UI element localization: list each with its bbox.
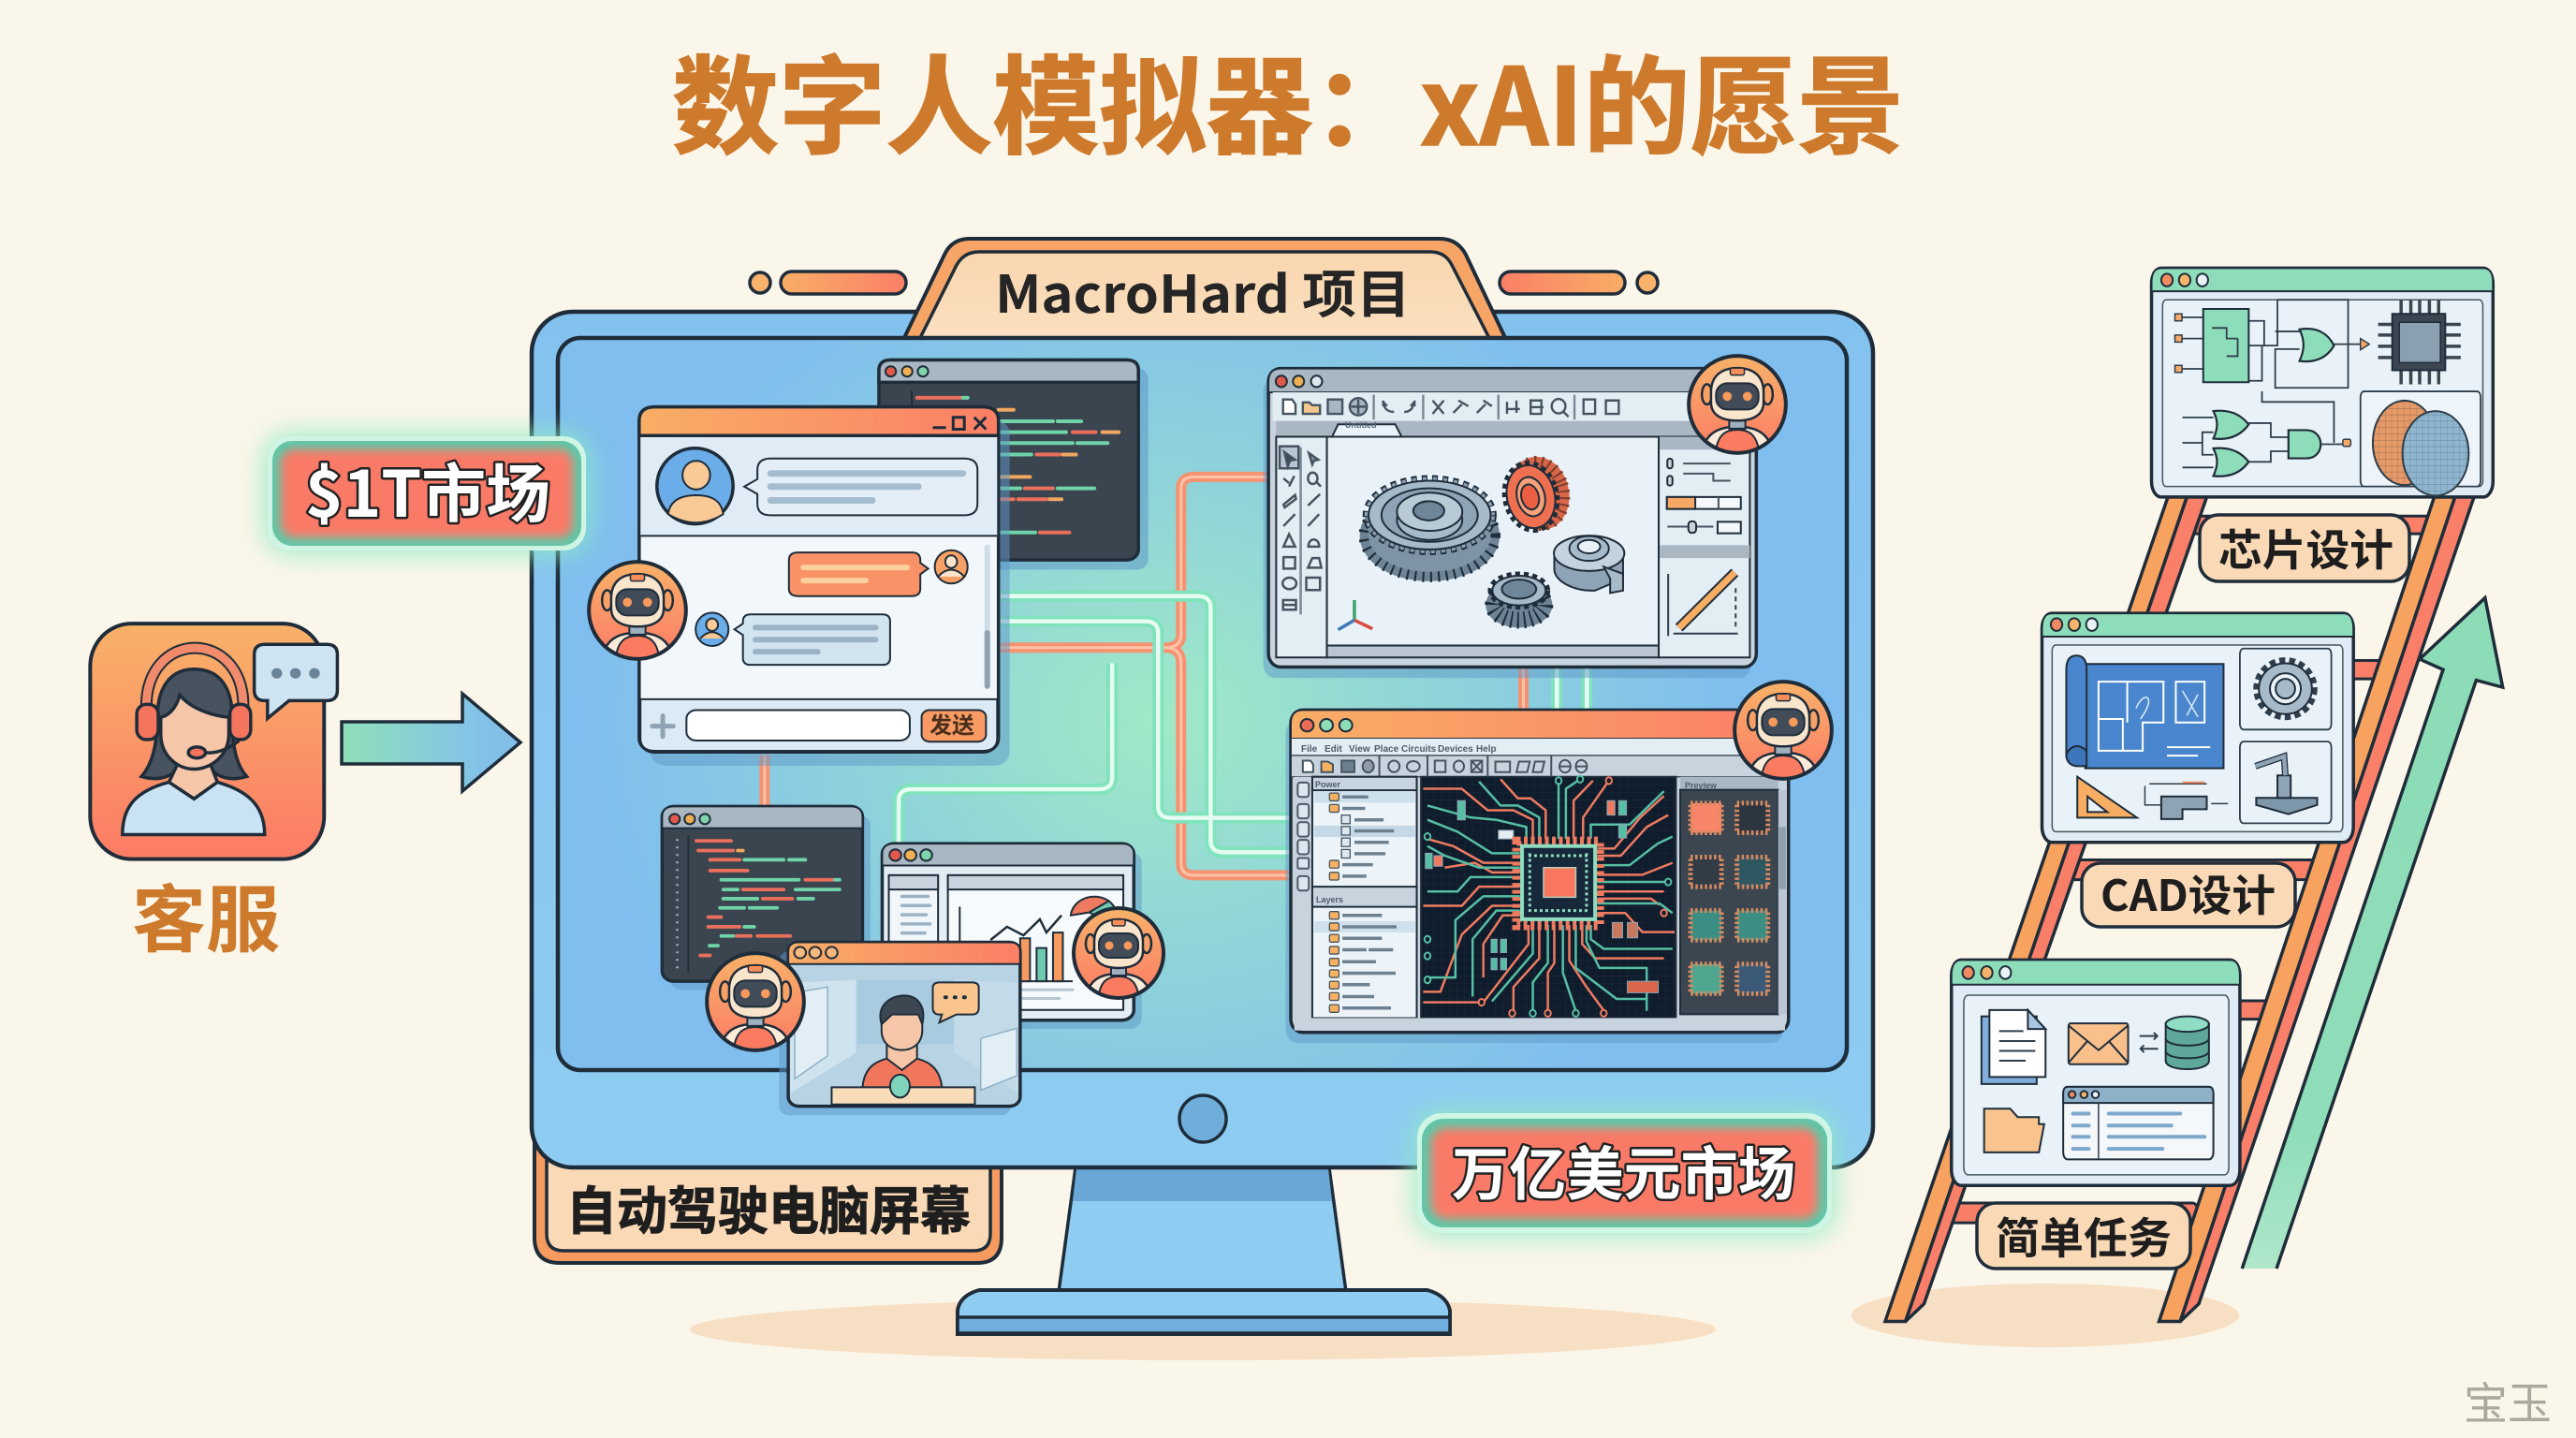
- label: CAD设计: CAD设计: [2100, 862, 2276, 924]
- window: code editor: [662, 806, 871, 990]
- IC chip: [2378, 300, 2461, 385]
- robot avatar: video: [707, 953, 804, 1052]
- connector: mint lines: [899, 596, 1293, 852]
- label: 客服: 客服: [132, 862, 280, 967]
- PCB menu bar: View: [1349, 744, 1370, 755]
- small avatar agent: [935, 550, 968, 583]
- window group: bottom apps: [662, 806, 1142, 1115]
- arrow: customer service to monitor: [342, 694, 520, 791]
- growth arrow: [2242, 598, 2503, 1269]
- ladder right rail: [2159, 497, 2474, 1321]
- badge: 万亿美元市场: 万亿美元市场: [1452, 1127, 1795, 1211]
- header tab: MacroHard 项目: [902, 239, 1507, 342]
- big gear: [1368, 479, 1492, 572]
- monitor stand: [958, 1161, 1450, 1334]
- transfer arrows: [2140, 1033, 2159, 1052]
- window: back code editor: [879, 360, 1149, 570]
- connector: orange bracket: [765, 477, 1293, 875]
- small gear: [1491, 575, 1547, 620]
- gear card: [2240, 649, 2332, 729]
- logic block: [2203, 309, 2248, 382]
- watermark: 宝玉: [2464, 1368, 2552, 1432]
- window group: PCB: [1285, 710, 1789, 1043]
- flanged part: [1554, 536, 1624, 593]
- left sidebar: [1295, 777, 1312, 1018]
- envelope icon: [2069, 1023, 2129, 1064]
- window: simple tasks: [1952, 960, 2240, 1185]
- robot arm card: [2240, 741, 2332, 823]
- power button: [1179, 1095, 1226, 1142]
- robot avatar: chat: [589, 562, 686, 661]
- floor shadow: ladder: [1852, 1284, 2239, 1347]
- PCB menu bar: File: [1301, 744, 1318, 755]
- ladder left rail: [1885, 497, 2207, 1321]
- decorative pill right: [1500, 271, 1658, 294]
- PCB panel captions: [1315, 780, 1718, 904]
- PCB traces coral: [1423, 779, 1675, 1013]
- badge: $1T市场: $1T市场: [305, 443, 550, 536]
- toolbar icons: [1283, 395, 1618, 419]
- connectors between windows: [765, 477, 1293, 875]
- monitor body: [532, 312, 1873, 1167]
- 3D axis: [1338, 600, 1372, 630]
- PCB canvas: [1421, 776, 1676, 1018]
- monitor screen: [558, 338, 1847, 1070]
- window: analytics chart: [882, 844, 1142, 1029]
- torso: [123, 782, 265, 835]
- PCB menu bar: Devices: [1438, 744, 1473, 755]
- label: 自动驾驶电脑屏幕: 自动驾驶电脑屏幕: [566, 1169, 971, 1244]
- connectors: CAD to PCB: [1518, 667, 1592, 713]
- circuit wiring: [2183, 300, 2362, 467]
- folder icon: [1984, 1108, 2044, 1152]
- robot avatar: CAD: [1689, 356, 1786, 455]
- PCB menu bar: Place: [1374, 744, 1399, 755]
- right properties: [1660, 437, 1749, 636]
- robot avatar: chart: [1074, 908, 1164, 1000]
- decorative pill left: [750, 271, 906, 294]
- PCB menu bar: Edit: [1325, 744, 1343, 755]
- blueprint: [2066, 655, 2223, 769]
- room background: [790, 980, 856, 1093]
- PCB panel captions: Preview: [1685, 781, 1718, 790]
- component library: [1680, 777, 1787, 1014]
- label: 芯片设计: 芯片设计: [2218, 517, 2393, 579]
- central processor: [1517, 842, 1600, 925]
- left tool palette: [1280, 447, 1322, 614]
- input bar: [640, 699, 997, 751]
- window: chat: [639, 407, 1010, 766]
- user avatar: [657, 448, 733, 524]
- window: video call: [779, 942, 1020, 1115]
- database icon: [2166, 1017, 2209, 1069]
- ladder rungs: [1948, 516, 2431, 1223]
- hair: [141, 669, 247, 779]
- mini app window: [2063, 1087, 2214, 1159]
- headset band: [146, 648, 243, 712]
- microphone: [205, 741, 239, 753]
- orange gear: [1497, 453, 1572, 537]
- window frame: [1264, 369, 1756, 678]
- PCB menu bar: Circuits: [1401, 744, 1437, 755]
- label: 简单任务: 简单任务: [1996, 1205, 2172, 1267]
- speech bubble: [933, 982, 979, 1022]
- set square: [2077, 777, 2137, 817]
- scrollbar: [985, 548, 990, 686]
- small avatar user: [695, 612, 728, 646]
- badge: $1T市场: [264, 433, 590, 554]
- face: [161, 695, 228, 770]
- ear cups: [137, 704, 158, 740]
- window: CAD design: [2042, 613, 2353, 843]
- window group: CAD: [1264, 369, 1756, 678]
- PCB panel captions: Power: [1315, 780, 1341, 789]
- speech bubble: [255, 644, 337, 718]
- user bubble: [735, 614, 890, 665]
- CAD tab caption: Untitled: [1345, 420, 1376, 430]
- logic gates: [2214, 329, 2334, 477]
- header tab: MacroHard 项目: MacroHard 项目: [995, 253, 1411, 328]
- chat bubble: [744, 459, 977, 515]
- desk with badge: [831, 1087, 974, 1105]
- PCB menu bar: Help: [1476, 744, 1497, 755]
- reply bubble: [789, 552, 929, 596]
- floor shadow: monitor: [690, 1299, 1716, 1360]
- PCB menu bar: [1301, 744, 1497, 755]
- title: 数字人模拟器：xAI的愿景: [672, 22, 1904, 176]
- window frame: [1285, 710, 1789, 1043]
- window: chip design: [2152, 268, 2493, 497]
- section profile: [2144, 783, 2228, 819]
- customer service icon: [90, 624, 337, 859]
- PCB traces teal: [1427, 779, 1673, 1011]
- toolbar: [1303, 756, 1587, 776]
- PCB pads: [1479, 777, 1667, 1017]
- robot avatar: PCB: [1734, 682, 1832, 781]
- window controls: [933, 418, 986, 430]
- PCB components: [1426, 800, 1659, 992]
- send button label: 发送: [929, 707, 974, 740]
- PCB panel captions: Layers: [1316, 895, 1343, 904]
- wafers: [2361, 391, 2481, 495]
- neck: [169, 762, 217, 799]
- badge: 万亿美元市场: [1413, 1109, 1836, 1237]
- presenter: [862, 995, 942, 1087]
- window group: code and chat: [639, 360, 1149, 766]
- label: 自动驾驶电脑屏幕: [534, 1123, 1002, 1263]
- project tree: [1312, 777, 1417, 1018]
- document icon: [1982, 1010, 2045, 1084]
- ladder and task windows: [1885, 268, 2503, 1321]
